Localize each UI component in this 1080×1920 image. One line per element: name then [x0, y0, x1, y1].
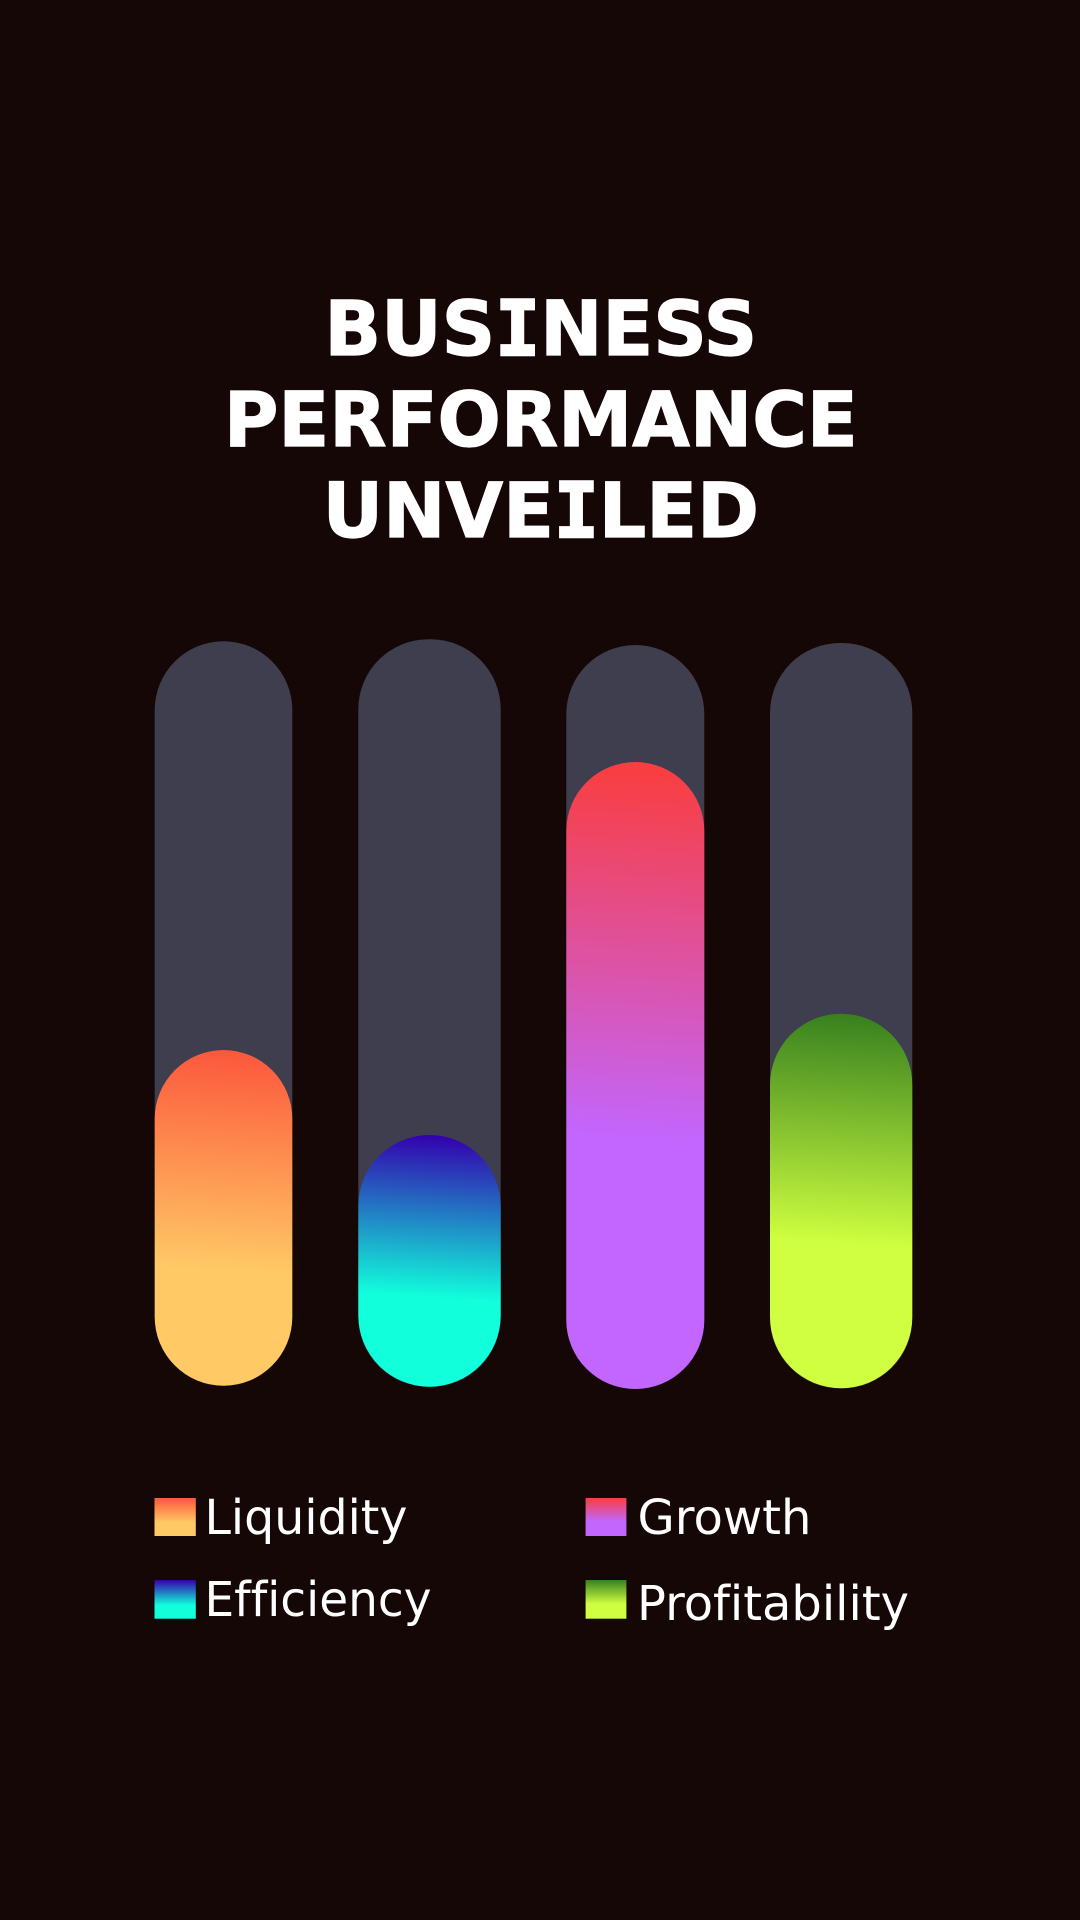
fill: Profitability	[770, 1014, 912, 1388]
track: Profitability	[770, 643, 912, 1388]
track: Efficiency	[358, 639, 501, 1387]
bar: Profitability	[770, 643, 912, 1388]
title: UNVEILED	[323, 466, 759, 555]
legend item: Growth: Growth	[638, 1490, 812, 1546]
track: Growth	[566, 645, 704, 1389]
fill: Growth	[566, 762, 704, 1389]
legend item: Efficiency: Efficiency	[204, 1572, 432, 1628]
fill: Liquidity	[155, 1050, 292, 1386]
legend item: Profitability: Profitability	[637, 1576, 909, 1632]
title	[224, 284, 858, 555]
title: BUSINESS	[324, 284, 757, 373]
legend item: Liquidity: Liquidity	[204, 1490, 408, 1546]
fill: Efficiency	[358, 1135, 501, 1387]
bar: Efficiency	[358, 639, 501, 1387]
bar: Growth	[566, 645, 704, 1389]
title: PERFORMANCE	[224, 375, 858, 464]
track: Liquidity	[155, 641, 292, 1386]
bar: Liquidity	[155, 641, 292, 1386]
legend	[154, 1490, 909, 1632]
